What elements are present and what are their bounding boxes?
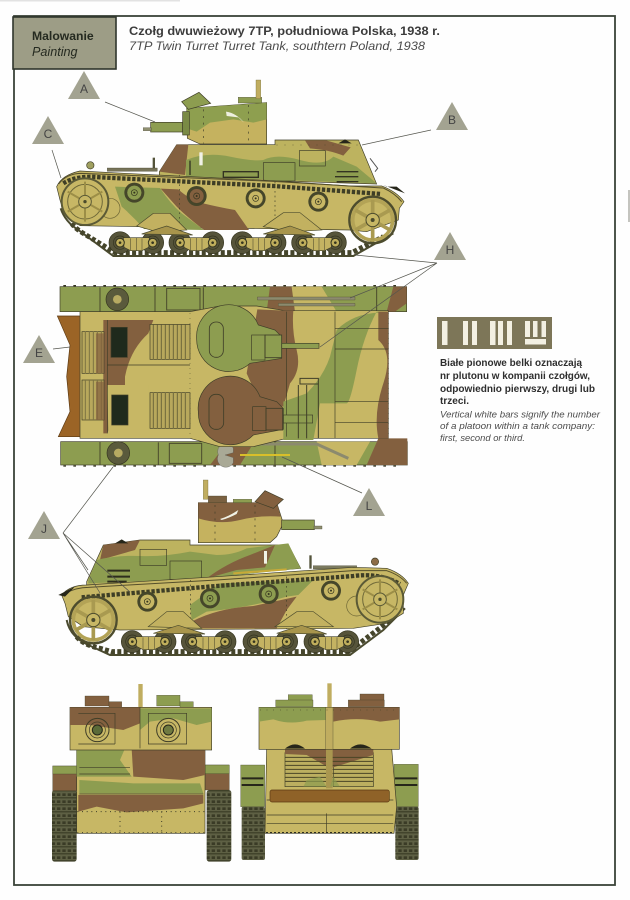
- drive sprocket: [357, 576, 403, 623]
- turrets front: [70, 684, 212, 750]
- lower hull with camouflage: [58, 558, 408, 630]
- engine hatches: [111, 327, 128, 425]
- marker J: [28, 511, 60, 539]
- turrets rear: [259, 683, 399, 749]
- platoon note, Polish: Białe pionowe belki oznaczają: [440, 358, 582, 369]
- upper turret seen from above: [197, 305, 319, 371]
- rear hull: [265, 748, 397, 833]
- marker J: J: [41, 522, 47, 536]
- track lower run: [61, 208, 393, 256]
- leader lines: [52, 102, 437, 593]
- front hull: [77, 748, 205, 833]
- marker E: E: [35, 346, 43, 360]
- track lower run: [67, 608, 405, 655]
- platoon note, Polish: odpowiednio pierwszy, drugi lub: [440, 384, 595, 395]
- platoon note, English: first, second or third.: [440, 433, 525, 443]
- scan edge marks: [0, 0, 630, 222]
- marker B: [436, 102, 468, 130]
- tank side view, right-facing: [58, 480, 408, 655]
- engine grilles: [82, 324, 190, 428]
- marker A: A: [80, 82, 88, 96]
- marker E: [23, 335, 55, 363]
- tracks and fenders: [241, 764, 419, 860]
- marker B: B: [448, 113, 456, 127]
- engine grilles rear: [285, 748, 373, 788]
- road wheel bogies: [109, 226, 346, 254]
- platoon bars legend: [437, 317, 552, 349]
- hull deck: [80, 306, 388, 447]
- road wheel bogies: [121, 625, 359, 653]
- rear plate: [57, 316, 81, 437]
- superstructure: [107, 139, 378, 184]
- upper fender: [60, 286, 407, 312]
- header label: painting: Painting: [32, 45, 78, 59]
- lower hull with camouflage: [57, 162, 405, 232]
- drive sprocket: [62, 178, 108, 225]
- marker L: [353, 488, 385, 516]
- rolled canvas: [270, 790, 389, 802]
- header label: painting: [13, 17, 116, 69]
- idler wheel: [70, 597, 117, 643]
- idler wheel: [349, 197, 396, 243]
- platoon note, English: Vertical white bars signify the number: [440, 410, 601, 420]
- turret: [198, 480, 322, 543]
- title: 7TP Twin Turret Turret Tank, southtern Poland, 1938: [129, 39, 425, 53]
- marker C: C: [44, 127, 53, 141]
- platoon note, Polish: trzeci.: [440, 396, 469, 407]
- platoon note, English: of a platoon within a tank company:: [440, 421, 595, 431]
- title: [129, 24, 440, 53]
- header label: painting: Malowanie: [32, 29, 94, 43]
- return rollers: [137, 581, 341, 612]
- superstructure: [87, 539, 357, 587]
- lower turret seen from above: [198, 376, 318, 445]
- tank front view: [52, 684, 231, 862]
- platoon note, Polish: nr plutonu w kompanii czołgów,: [440, 371, 590, 382]
- return rollers: [124, 183, 328, 212]
- tank top view: [57, 286, 407, 467]
- tracks and fenders: [52, 765, 231, 862]
- lower fender: [61, 438, 407, 467]
- turret: [143, 80, 267, 144]
- marker L: L: [366, 499, 373, 513]
- marker C: [32, 116, 64, 144]
- marker H: [434, 232, 466, 260]
- marker H: H: [446, 243, 454, 257]
- marker A: [68, 71, 100, 99]
- tank rear view: [241, 683, 419, 860]
- title: Czołg dwuwieżowy 7TP, południowa Polska, 1938 r.: [129, 24, 440, 38]
- tank side view, left-facing: [57, 80, 405, 256]
